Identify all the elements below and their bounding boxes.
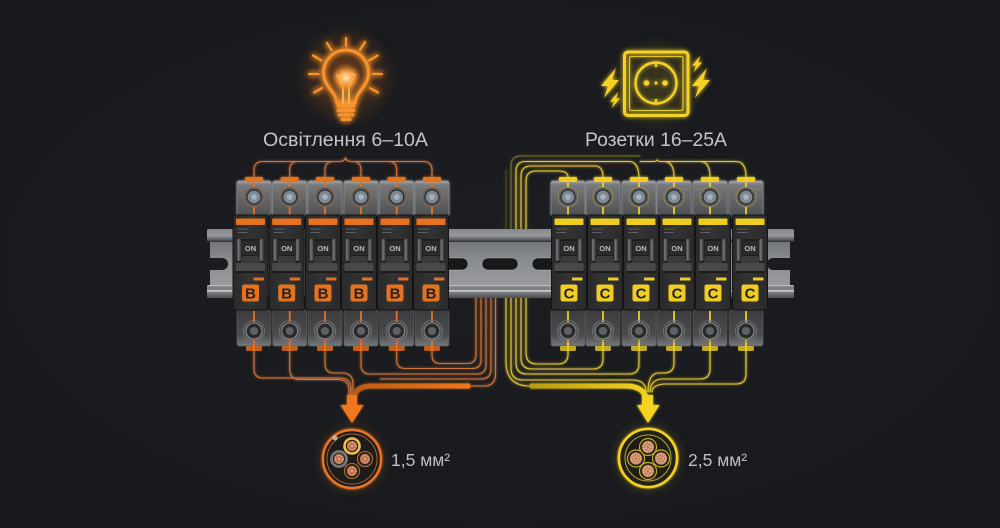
breaker labels C: ON bbox=[599, 244, 611, 253]
heading: lighting: Освітлення 6–10А bbox=[263, 129, 428, 151]
bottom terminals C bbox=[551, 310, 763, 351]
breaker labels B: ON bbox=[317, 244, 329, 253]
wires: orange bottom runs bbox=[254, 297, 496, 395]
breaker labels C: C bbox=[672, 286, 683, 302]
breaker labels B: B bbox=[390, 286, 401, 302]
panel: lighting breakers, type B bbox=[233, 177, 449, 351]
breaker bodies C bbox=[552, 215, 768, 310]
breaker labels B: ON bbox=[281, 244, 292, 253]
breaker labels B: ON bbox=[245, 244, 256, 253]
breaker labels C: C bbox=[600, 286, 611, 302]
orange cable and arrow bbox=[340, 386, 470, 423]
breaker labels C: C bbox=[564, 286, 575, 302]
wires: yellow bottom runs bbox=[506, 297, 746, 392]
icon: cable section 2.5 bbox=[608, 418, 688, 498]
wires: yellow top bus bbox=[506, 156, 746, 229]
breaker labels B: B bbox=[426, 286, 437, 302]
breaker labels C: C bbox=[708, 286, 719, 302]
icon: cable section 1.5 bbox=[312, 419, 392, 499]
panel: socket breakers, type C bbox=[551, 177, 768, 351]
breaker labels B: B bbox=[318, 286, 329, 302]
breaker labels B: ON bbox=[353, 244, 365, 253]
breaker labels C: C bbox=[745, 286, 756, 302]
top terminals C bbox=[551, 177, 763, 216]
breaker labels C: ON bbox=[671, 244, 683, 253]
icon: light bulb bbox=[294, 24, 398, 128]
breaker labels C: C bbox=[636, 286, 647, 302]
breaker labels C: ON bbox=[563, 244, 575, 253]
din rail bbox=[207, 229, 794, 298]
label: 2,5 mm2: 2,5 мм² bbox=[688, 450, 747, 470]
breaker labels B: ON bbox=[389, 244, 401, 253]
breaker labels B bbox=[245, 244, 437, 302]
heading: sockets: Розетки 16–25А bbox=[585, 129, 727, 151]
breaker labels B: ON bbox=[425, 244, 437, 253]
top terminals B bbox=[237, 177, 449, 216]
breaker labels C: ON bbox=[707, 244, 719, 253]
breaker labels B: B bbox=[245, 286, 256, 302]
breaker labels C: ON bbox=[635, 244, 647, 253]
bottom terminals B bbox=[237, 310, 449, 351]
breaker labels B: B bbox=[354, 286, 365, 302]
yellow cable and arrow bbox=[530, 386, 660, 423]
label: 1,5 mm2: 1,5 мм² bbox=[391, 450, 450, 470]
breaker labels C bbox=[563, 244, 756, 302]
breaker labels B: B bbox=[281, 286, 292, 302]
breaker labels C: ON bbox=[744, 244, 756, 253]
icon: power socket with lightning bbox=[601, 36, 710, 132]
wires: orange top bus bbox=[254, 158, 432, 177]
breaker bodies B bbox=[233, 215, 448, 310]
